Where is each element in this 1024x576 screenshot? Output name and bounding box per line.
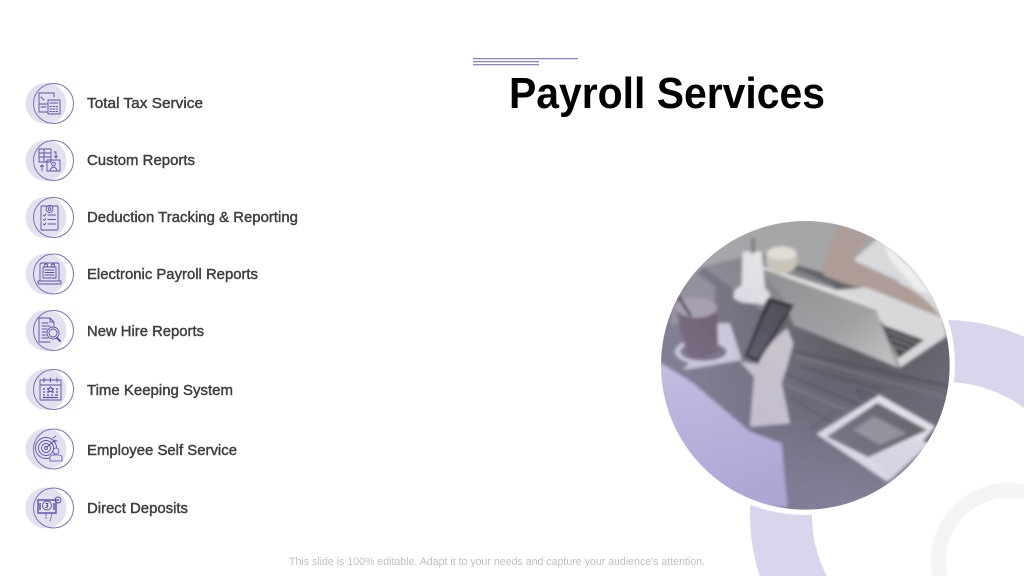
icon: clipboard checklist [26, 197, 74, 238]
sugar jar [733, 252, 770, 305]
item: Electronic Payroll Reports: Electronic Payroll Reports [87, 266, 258, 283]
icon: calendar [26, 369, 74, 410]
item: Deduction Tracking & Reporting: Deduction Tracking & Reporting [87, 209, 298, 226]
phone [744, 297, 794, 363]
icon: target and person [26, 428, 74, 470]
item: Time Keeping System [26, 369, 233, 410]
item: Employee Self Service [26, 428, 237, 470]
small cup [764, 254, 799, 275]
tablet [817, 395, 935, 482]
item: New Hire Reports: New Hire Reports [87, 323, 204, 340]
wood grain [788, 350, 948, 422]
accent lines above title [473, 58, 578, 65]
item: Total Tax Service: Total Tax Service [87, 95, 203, 112]
item: Custom Reports: Custom Reports [87, 152, 195, 169]
decorative lavender ring [750, 320, 1024, 576]
item: Direct Deposits [26, 488, 188, 528]
item: Employee Self Service: Employee Self Service [87, 442, 237, 459]
item: Direct Deposits: Direct Deposits [87, 500, 188, 517]
item: Deduction Tracking & Reporting [26, 197, 298, 238]
laptop lid [766, 273, 900, 369]
icon: document with magnifier [26, 310, 74, 351]
item: New Hire Reports [26, 310, 204, 351]
arm [823, 225, 943, 320]
footer note: This slide is 100% editable. Adapt it to your needs and capture your audience's attention. [289, 556, 705, 568]
left hand [670, 270, 715, 325]
photo: hands with phone, laptop and tablet on a wooden table [661, 221, 955, 515]
background above table [695, 221, 913, 284]
icon: banknote deposit [26, 488, 74, 528]
saucer and iced drink [673, 341, 692, 364]
item: Custom Reports [26, 140, 195, 181]
hand holding phone [740, 328, 793, 427]
item: Time Keeping System: Time Keeping System [87, 382, 233, 399]
lavender sleeve [661, 361, 789, 508]
keyboard [883, 325, 924, 358]
item: Electronic Payroll Reports [26, 254, 258, 294]
napkin [683, 323, 742, 370]
white shirt upper right [837, 210, 963, 310]
decorative grey ring [931, 483, 1024, 576]
icon: linked reports [26, 140, 74, 181]
title: Payroll Services [509, 69, 825, 118]
gradient wash [661, 264, 912, 510]
item: Total Tax Service [26, 83, 203, 124]
icon: laptop report [26, 254, 74, 294]
laptop base [837, 287, 947, 367]
icon: tax document and calculator [26, 83, 74, 124]
